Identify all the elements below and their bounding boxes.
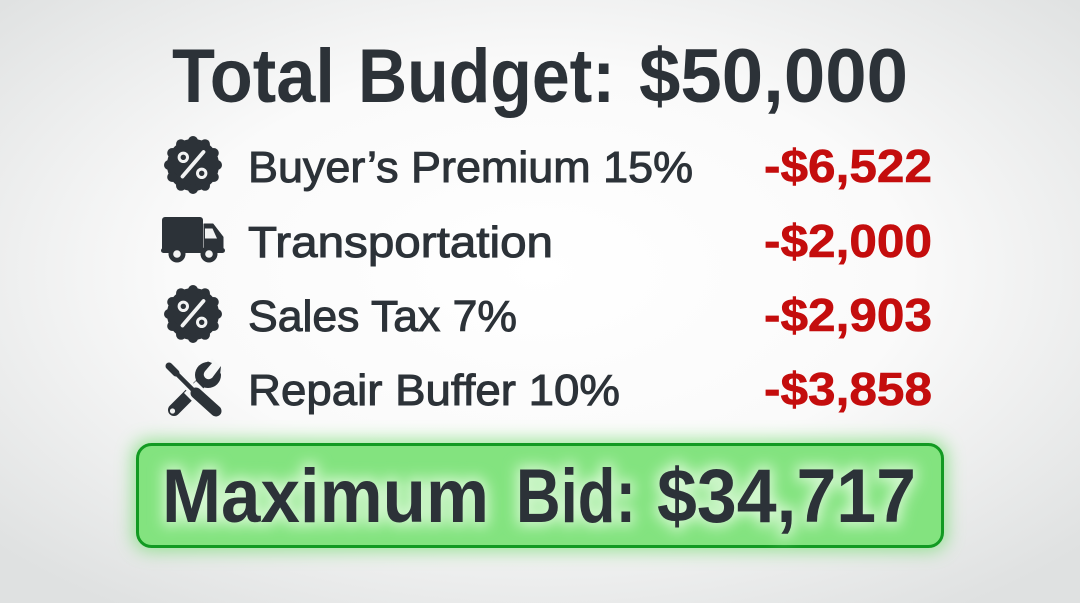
amount: repair buffer: -$3,858 <box>764 363 932 415</box>
icon: percent badge <box>164 285 222 343</box>
maximum bid text <box>162 454 916 539</box>
amount: sales tax: -$2,903 <box>764 289 932 341</box>
label: transportation: Transportation <box>248 218 553 267</box>
title <box>172 34 908 119</box>
title: $50,000 <box>639 34 908 119</box>
label: buyer's premium: Buyer’s Premium 15% <box>248 143 693 192</box>
callout: maximum bid <box>133 440 947 551</box>
maximum bid text: Maximum <box>162 454 489 539</box>
label: repair buffer: Repair Buffer 10% <box>248 366 620 415</box>
icon: truck <box>161 217 225 262</box>
maximum bid text: $34,717 <box>657 454 916 539</box>
row: sales tax <box>164 285 932 343</box>
icon: percent badge <box>164 136 222 194</box>
callout: maximum bid: $34,717 <box>657 454 916 539</box>
maximum bid text: Bid: <box>516 454 636 539</box>
callout: maximum bid: Bid: <box>516 454 636 539</box>
callout: maximum bid: Maximum <box>162 454 489 539</box>
amount: buyer's premium: -$6,522 <box>764 140 932 192</box>
title: Budget: <box>358 34 615 119</box>
label: sales tax: Sales Tax 7% <box>248 292 517 341</box>
amount: transportation: -$2,000 <box>764 215 932 267</box>
row: repair buffer <box>169 358 932 415</box>
title: Total <box>172 34 335 119</box>
row: transportation <box>161 215 932 267</box>
row: buyer's premium <box>164 136 932 194</box>
icon: tools <box>169 358 225 414</box>
